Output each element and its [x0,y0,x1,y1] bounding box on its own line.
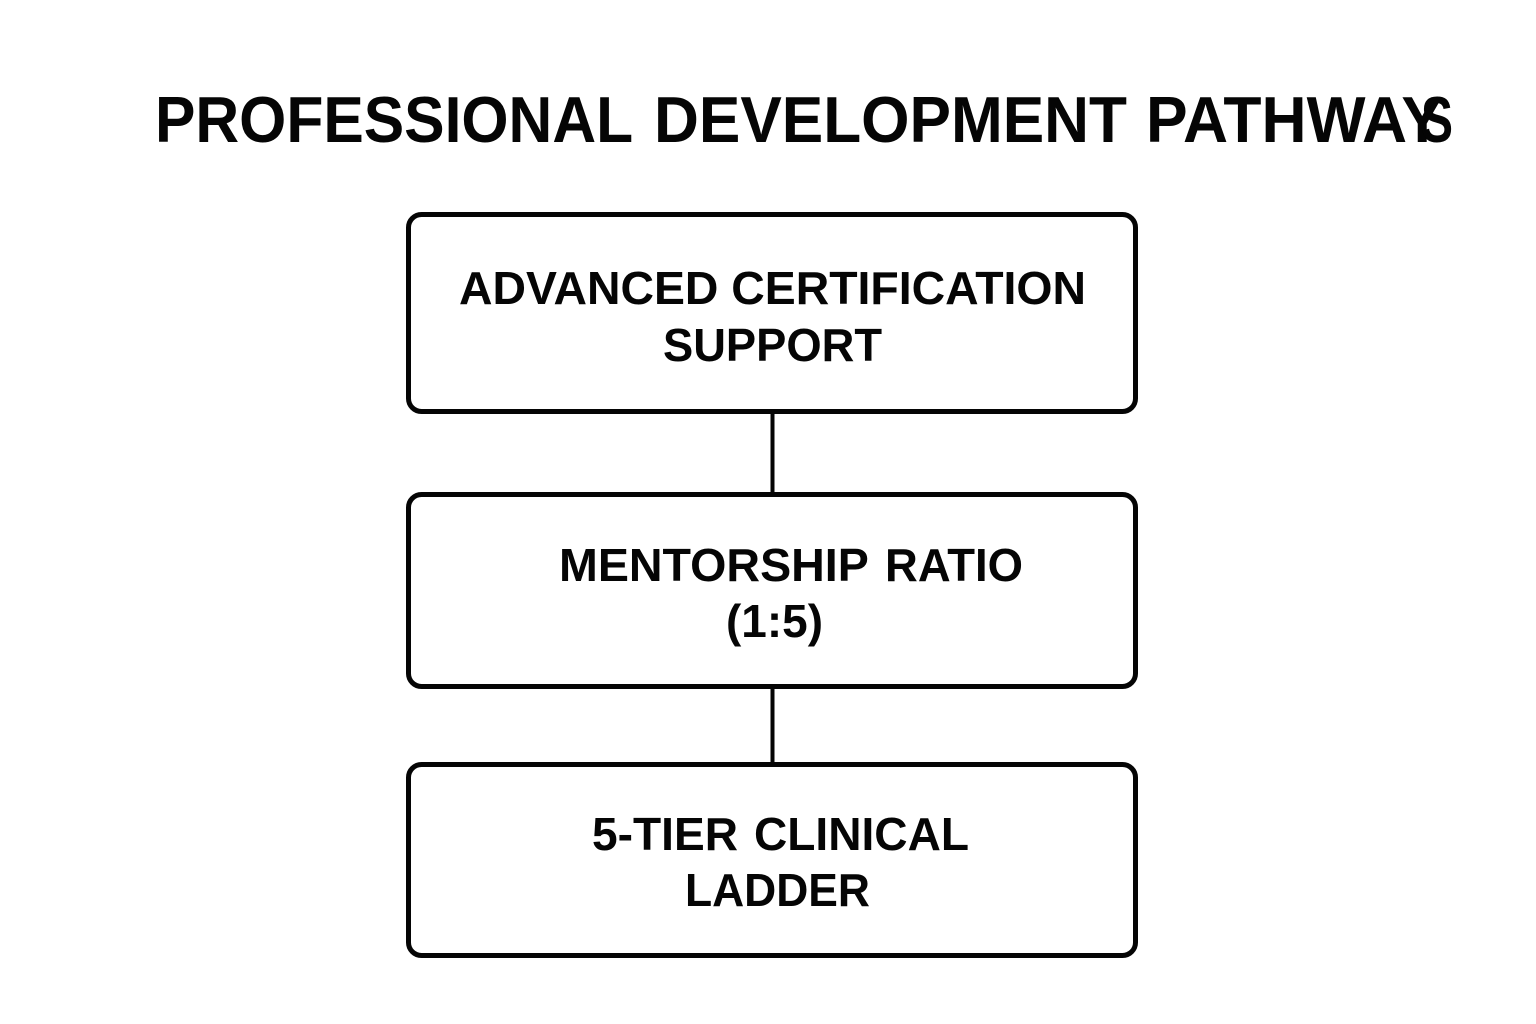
connector: certification to mentorship [770,412,774,495]
label: mentorship ratio: RATIO [885,539,1023,591]
label: 5-tier clinical ladder: 5-TIER [592,808,738,860]
title: PATHWAY [1146,84,1443,156]
label: advanced certification support: ADVANCED CERTIFICATION [459,262,1086,314]
panel: mentorship ratio [408,494,1136,686]
connector: mentorship to clinical ladder [770,687,774,765]
panel: 5-tier clinical ladder [408,764,1136,956]
label: advanced certification support: SUPPORT [663,319,882,371]
title: DEVELOPMENT [654,84,1127,156]
label: 5-tier clinical ladder: CLINICAL [754,808,969,860]
title: PROFESSIONAL [155,84,632,156]
label: mentorship ratio: (1:5) [726,595,823,647]
label: 5-tier clinical ladder: LADDER [685,864,870,916]
label: mentorship ratio: MENTORSHIP [559,539,868,591]
label: mentorship ratio [559,539,1023,647]
title: S [1421,84,1453,156]
label: advanced certification support [459,262,1086,371]
label: 5-tier clinical ladder [592,808,969,916]
panel: advanced certification support [408,214,1136,412]
